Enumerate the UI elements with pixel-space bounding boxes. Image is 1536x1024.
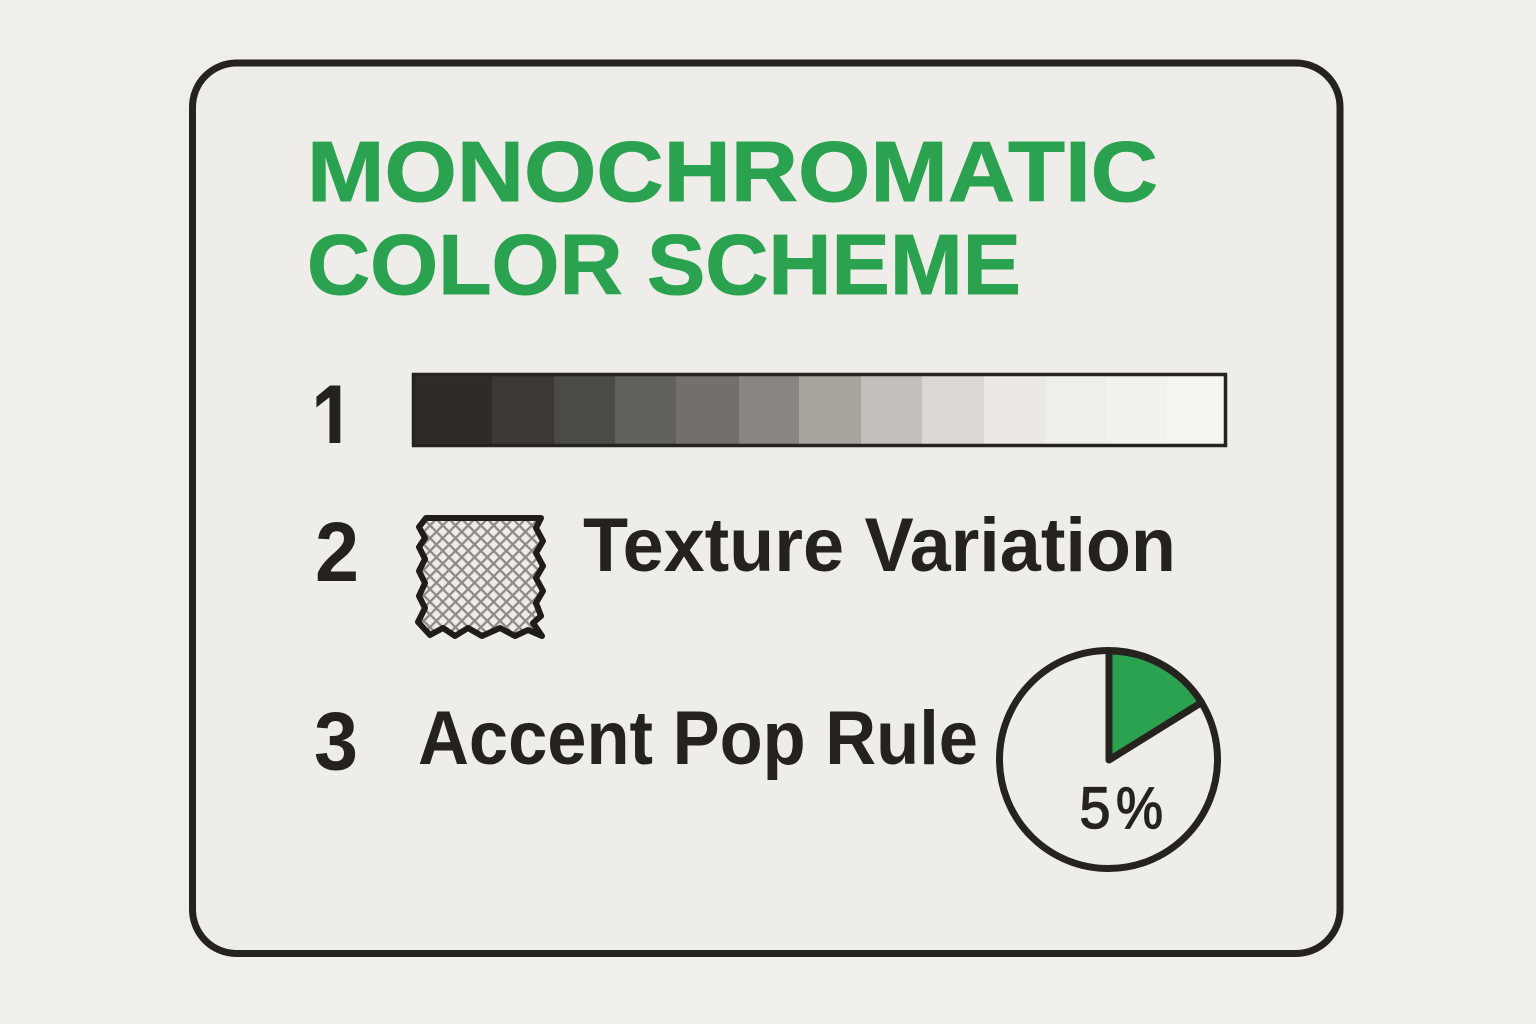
pie label: [1080, 776, 1163, 841]
item 3: number: 3: [314, 694, 358, 788]
pie wedge: [1109, 651, 1202, 760]
title: [307, 125, 1158, 313]
pie label: %: [1116, 776, 1163, 841]
item 3: label: Accent Pop Rule: [418, 696, 978, 781]
item 2: texture swatch icon: [418, 518, 543, 636]
pie label: 5: [1080, 776, 1110, 841]
item 1: number: 1: [311, 364, 355, 476]
item 2: label: Texture Variation: [583, 503, 1176, 588]
item 1: tonal gradient bar: [414, 374, 1226, 446]
title: COLOR SCHEME: [307, 218, 1021, 313]
title: MONOCHROMATIC: [307, 125, 1158, 220]
panel: main frame: [192, 63, 1340, 954]
item 3: pie chart 5%: [1000, 650, 1218, 868]
item 2: number: 2: [315, 505, 359, 599]
